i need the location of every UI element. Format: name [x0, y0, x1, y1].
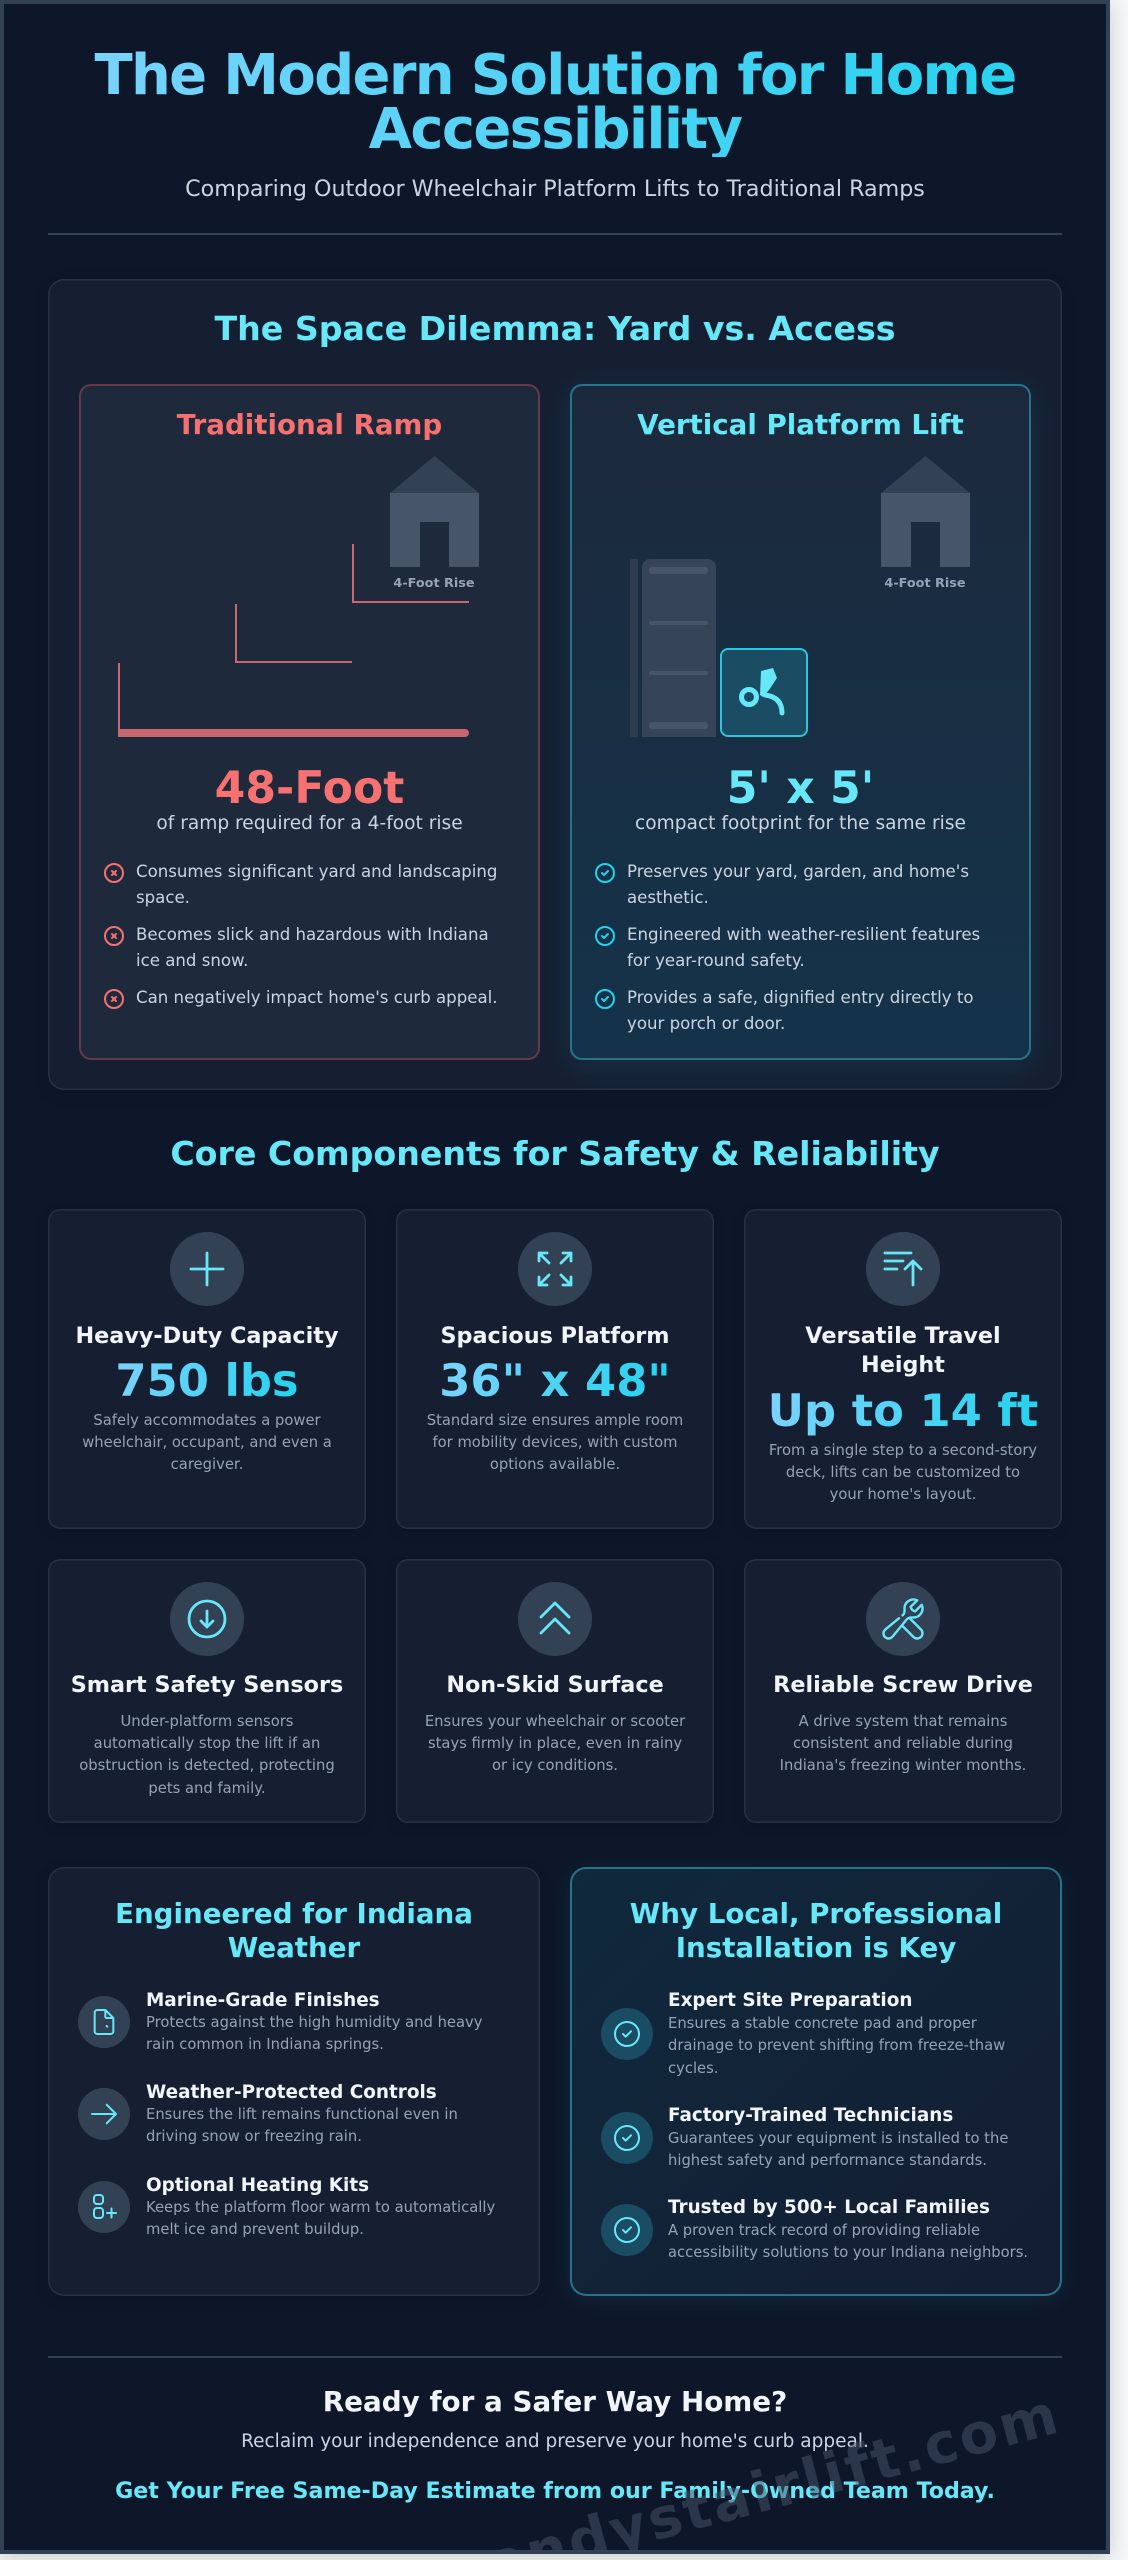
item text: driving snow or freezing rain.: [146, 2128, 362, 2145]
panel: traditional ramp: [79, 384, 540, 1060]
panel heading: [115, 1897, 473, 1964]
card: versatile travel height: [744, 1209, 1062, 1529]
icon: house: [881, 456, 970, 567]
item text: [146, 2199, 495, 2238]
card text: automatically stop the lift if an: [94, 1735, 320, 1752]
icon: sort ascending: [866, 1232, 940, 1306]
panel heading: Weather: [228, 1931, 360, 1964]
bullet: slick and hazardous: ice and snow.: [136, 950, 248, 970]
bullet: yard space: [104, 862, 497, 906]
bullet: slick and hazardous: Becomes slick and hazardous with Indiana: [136, 924, 489, 944]
card text: [82, 1412, 332, 1473]
icon: shapes plus: [78, 2181, 130, 2233]
card text: pets and family.: [148, 1780, 266, 1797]
card text: deck, lifts can be customized to: [786, 1464, 1020, 1481]
item text: [668, 2222, 1028, 2261]
item text: rain common in Indiana springs.: [146, 2036, 384, 2053]
icon: arrow right: [78, 2088, 130, 2140]
icon: house: [390, 456, 479, 567]
bullet: weather resilient: for year-round safety.: [627, 950, 805, 970]
item: trusted by local families: [601, 2197, 1028, 2261]
footer heading: Ready for a Safer Way Home?: [323, 2385, 787, 2418]
item: weather-protected controls: [78, 2082, 458, 2145]
illustration: lift tower and platform: [630, 559, 808, 737]
card text: [780, 1713, 1026, 1774]
item title: Marine-Grade Finishes: [146, 1990, 380, 2011]
item text: cycles.: [668, 2060, 718, 2077]
item text: Protects against the high humidity and heavy: [146, 2014, 482, 2031]
item text: accessibility solutions to your Indiana neighbors.: [668, 2244, 1028, 2261]
item text: drainage to prevent shifting from freeze-thaw: [668, 2037, 1005, 2054]
panel: vertical platform lift: [570, 384, 1031, 1060]
title: Accessibility: [369, 97, 741, 162]
panel: engineered for Indiana weather: [48, 1867, 540, 2296]
icon: expand arrows: [518, 1232, 592, 1306]
card heading: Height: [861, 1352, 945, 1378]
item text: [146, 2106, 458, 2145]
item: marine-grade finishes: [78, 1990, 482, 2053]
bullet: weather resilient: Engineered with weather-resilient features: [627, 924, 980, 944]
panel heading: [630, 1897, 1002, 1964]
item text: Guarantees your equipment is installed to the: [668, 2130, 1008, 2147]
card heading: Smart Safety Sensors: [71, 1672, 343, 1698]
item title: Weather-Protected Controls: [146, 2082, 437, 2103]
stat: 5 x 5: 5' x 5': [727, 763, 874, 814]
panel heading: Installation is Key: [676, 1931, 956, 1964]
title: [48, 49, 1062, 157]
icon: plus: [170, 1232, 244, 1306]
heading: vertical platform lift: Vertical Platform Lift: [637, 408, 964, 440]
card heading: [805, 1323, 1001, 1378]
title: The Modern Solution for Home: [94, 43, 1016, 108]
item: factory-trained technicians: [601, 2105, 1008, 2169]
panel heading: Engineered for Indiana: [115, 1897, 473, 1930]
card: non-skid surface: [396, 1559, 714, 1823]
bullet: yard space: space.: [136, 888, 190, 906]
icon: double chevron up: [518, 1582, 592, 1656]
card stat: 750 lbs: [115, 1354, 299, 1407]
card text: [79, 1713, 335, 1797]
bullet: dignified entry: [595, 988, 974, 1032]
item text: Ensures a stable concrete pad and proper: [668, 2015, 977, 2032]
card text: stays firmly in place, even in rainy: [428, 1735, 682, 1752]
bullet: preserves yard: aesthetic.: [627, 888, 709, 906]
icon: check circle: [601, 2112, 653, 2164]
icon: check circle: [601, 2008, 653, 2060]
card heading: Non-Skid Surface: [446, 1672, 664, 1698]
item text: [146, 2014, 482, 2053]
item text: [668, 2015, 1005, 2077]
card text: Ensures your wheelchair or scooter: [425, 1713, 685, 1730]
footer call to action: Get Your Free Same-Day Estimate from our Family-Owned Team Today.: [115, 2478, 995, 2504]
bullet: weather resilient: [595, 924, 980, 970]
bullet: curb appeal: Can negatively impact home's curb appeal.: [136, 988, 498, 1006]
stat: 48-foot: 48-Foot: [215, 763, 404, 814]
card text: From a single step to a second-story: [769, 1442, 1037, 1459]
card stat: Up to 14 ft: [768, 1384, 1038, 1437]
card text: Standard size ensures ample room: [427, 1412, 683, 1429]
icon: arrow circle down: [170, 1582, 244, 1656]
icon: document: [78, 1996, 130, 2048]
card text: Under-platform sensors: [121, 1713, 293, 1730]
panel heading: Why Local, Professional: [630, 1897, 1002, 1930]
card stat: 36" x 48": [439, 1354, 671, 1407]
label: 4-foot rise: 4-Foot Rise: [393, 576, 475, 591]
card text: Safely accommodates a power: [93, 1412, 321, 1429]
card text: your home's layout.: [830, 1486, 976, 1503]
bullet: dignified entry: Provides a safe, dignified entry directly to: [627, 988, 974, 1006]
label: 4-foot rise: 4-Foot Rise: [884, 576, 966, 591]
card text: Indiana's freezing winter months.: [780, 1757, 1026, 1774]
card text: A drive system that remains: [799, 1713, 1007, 1730]
item text: melt ice and prevent buildup.: [146, 2221, 364, 2238]
card text: wheelchair, occupant, and even a: [82, 1434, 332, 1451]
icon: check circle: [601, 2204, 653, 2256]
item: optional heating kits: [78, 2175, 495, 2238]
stat caption: of ramp required for a 4-foot rise: [156, 813, 463, 834]
card text: caregiver.: [171, 1456, 243, 1473]
card heading: Heavy-Duty Capacity: [76, 1323, 338, 1349]
card text: options available.: [490, 1456, 620, 1473]
subtitle: Comparing Outdoor Wheelchair Platform Lifts to Traditional Ramps: [185, 176, 925, 202]
chart: switchback ramp diagram: [118, 544, 469, 737]
card heading: Reliable Screw Drive: [773, 1672, 1033, 1698]
item title: Expert Site Preparation: [668, 1990, 912, 2011]
card text: [425, 1713, 686, 1774]
bullet: preserves yard: [595, 862, 969, 906]
item title: Optional Heating Kits: [146, 2175, 369, 2196]
footer tagline: Reclaim your independence and preserve your home's curb appeal.: [241, 2431, 869, 2452]
item text: Keeps the platform floor warm to automatically: [146, 2199, 495, 2216]
item text: Ensures the lift remains functional even in: [146, 2106, 458, 2123]
item title: Factory-Trained Technicians: [668, 2105, 953, 2126]
bullet: slick and hazardous: [104, 924, 489, 970]
card text: [769, 1442, 1037, 1503]
card: smart safety sensors: [48, 1559, 366, 1823]
card heading: Versatile Travel: [805, 1323, 1001, 1349]
panel: the space dilemma: [48, 279, 1062, 1090]
icon: wrench and screwdriver: [866, 1582, 940, 1656]
item text: [668, 2130, 1008, 2169]
panel: local professional installation: [570, 1867, 1062, 2296]
bullet: preserves yard: Preserves your yard, garden, and home's: [627, 862, 969, 880]
card text: obstruction is detected, protecting: [79, 1757, 335, 1774]
item text: highest safety and performance standards.: [668, 2152, 987, 2169]
bullet: yard space: Consumes significant yard and landscaping: [136, 862, 497, 880]
stat caption: compact footprint for the same rise: [635, 813, 966, 834]
card text: for mobility devices, with custom: [432, 1434, 678, 1451]
card text: [427, 1412, 683, 1473]
item: expert site preparation: [601, 1990, 1005, 2077]
card text: or icy conditions.: [492, 1757, 618, 1774]
bullet: dignified entry: your porch or door.: [627, 1014, 785, 1032]
section heading: core components: Core Components for Safety & Reliability: [170, 1134, 940, 1173]
card: spacious platform: [396, 1209, 714, 1529]
card text: consistent and reliable during: [793, 1735, 1013, 1752]
card heading: Spacious Platform: [440, 1323, 670, 1349]
heading: traditional ramp: Traditional Ramp: [177, 408, 442, 440]
item text: A proven track record of providing reliable: [668, 2222, 980, 2239]
card: heavy-duty capacity: [48, 1209, 366, 1529]
item title: Trusted by 500+ Local Families: [668, 2197, 990, 2218]
card: reliable screw drive: [744, 1559, 1062, 1823]
section heading: space dilemma: The Space Dilemma: Yard vs. Access: [215, 309, 895, 348]
